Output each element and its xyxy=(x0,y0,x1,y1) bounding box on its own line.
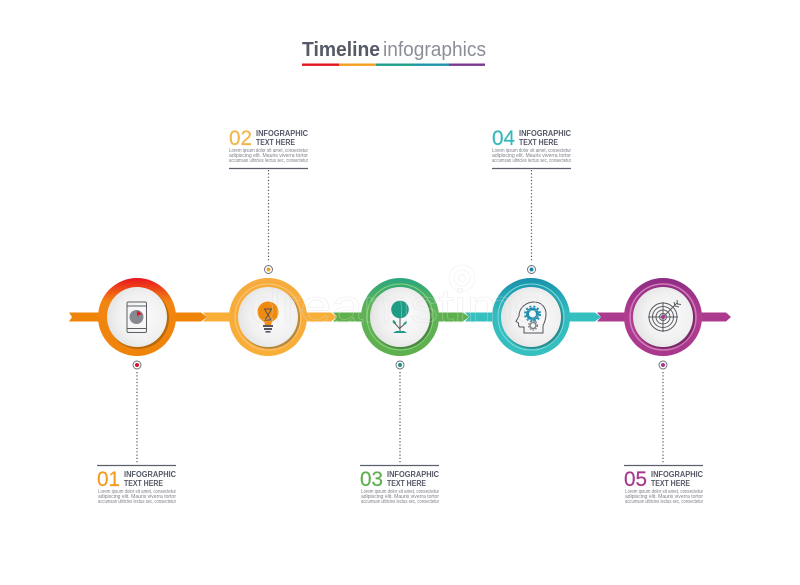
text block 04: accumsan ultricies lectus sec, consectetur xyxy=(492,158,571,164)
text block 05 xyxy=(624,466,703,505)
step 3 circle xyxy=(361,278,439,356)
text block 03: Lorem ipsum dolor sit amet, consectetur xyxy=(361,489,439,495)
title: Timeline xyxy=(302,39,380,61)
text block 01 xyxy=(97,466,176,505)
text block 03: 03 xyxy=(360,468,383,491)
text block 02: accumsan ultricies lectus sec, consectetur xyxy=(229,158,308,164)
icon: target with arrow xyxy=(648,300,681,332)
text block 05: Lorem ipsum dolor sit amet, consectetur xyxy=(625,489,703,495)
watermark: dreamstime xyxy=(250,280,545,332)
text block 01: 01 xyxy=(97,468,120,491)
title: infographics xyxy=(383,39,486,61)
step 1 circle xyxy=(98,278,176,356)
text block 04: TEXT HERE xyxy=(519,138,559,147)
watermark xyxy=(250,265,545,332)
text block 02: TEXT HERE xyxy=(256,138,296,147)
icon: tablet with pie chart xyxy=(127,302,146,332)
text block 05: 05 xyxy=(624,468,647,491)
connector 1 xyxy=(136,372,138,464)
text block 04: Lorem ipsum dolor sit amet, consectetur xyxy=(492,148,571,154)
text block 01: TEXT HERE xyxy=(124,479,164,488)
text block 05: INFOGRAPHIC xyxy=(651,470,703,479)
text block 05: adipiscing elit. Mauris viverra tortor xyxy=(625,494,703,500)
marker dot 1 xyxy=(133,361,141,369)
marker dot 2 xyxy=(264,266,272,274)
icon: plant with globe xyxy=(391,301,409,333)
timeline ribbon xyxy=(69,312,731,322)
text block 03: accumsan ultricies lectus sec, consectetur xyxy=(361,499,439,505)
text block 04: 04 xyxy=(492,127,515,150)
connector 2 xyxy=(268,170,270,262)
connector 4 xyxy=(530,170,532,262)
text block 05: TEXT HERE xyxy=(651,479,691,488)
text block 01: Lorem ipsum dolor sit amet, consectetur xyxy=(98,489,176,495)
text block 01: INFOGRAPHIC xyxy=(124,470,176,479)
marker dot 5 xyxy=(659,361,667,369)
text block 04: INFOGRAPHIC xyxy=(519,129,571,138)
text block 04: adipiscing elit. Mauris viverra tortor xyxy=(492,153,571,159)
text block 01: accumsan ultricies lectus sec, consectetur xyxy=(98,499,176,505)
text block 01: adipiscing elit. Mauris viverra tortor xyxy=(98,494,176,500)
marker dot 4 xyxy=(528,266,536,274)
title xyxy=(302,39,486,61)
text block 03 xyxy=(360,466,439,505)
text block 02: INFOGRAPHIC xyxy=(256,129,308,138)
step 2 circle xyxy=(229,278,307,356)
text block 03: TEXT HERE xyxy=(387,479,427,488)
connector 5 xyxy=(662,372,664,464)
marker dot 3 xyxy=(396,361,404,369)
text block 04 xyxy=(492,127,571,168)
text block 03: INFOGRAPHIC xyxy=(387,470,439,479)
text block 02: 02 xyxy=(229,127,252,150)
title underline: colour bar xyxy=(302,64,485,66)
icon: light bulb xyxy=(258,302,278,333)
connector 3 xyxy=(399,372,401,464)
text block 02: adipiscing elit. Mauris viverra tortor xyxy=(229,153,308,159)
text block 02 xyxy=(229,127,308,168)
text block 02: Lorem ipsum dolor sit amet, consectetur xyxy=(229,148,308,154)
step 4 circle xyxy=(492,278,570,356)
step 5 circle xyxy=(624,278,702,356)
text block 03: adipiscing elit. Mauris viverra tortor xyxy=(361,494,439,500)
text block 05: accumsan ultricies lectus sec, consectetur xyxy=(625,499,703,505)
icon: head with gears xyxy=(516,302,546,333)
